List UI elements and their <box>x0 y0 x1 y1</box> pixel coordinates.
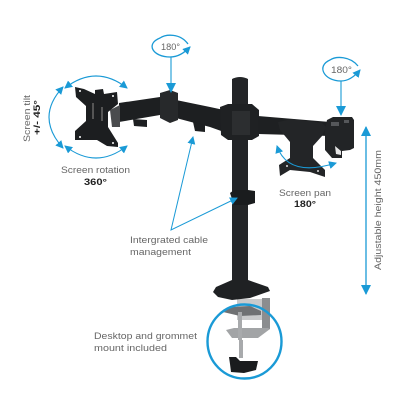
label: pan value: 180° <box>294 199 316 210</box>
left VESA plate <box>75 87 118 147</box>
label: screen pan: Screen pan <box>279 188 331 199</box>
180 rotation indicator right <box>323 58 360 115</box>
clamp knob <box>229 357 258 373</box>
label: adjustable height: Adjustable height 450mm <box>373 150 384 270</box>
label: desktop and grommet mount <box>94 331 197 354</box>
cable management arrows <box>171 137 237 230</box>
180 rotation indicator right: 180° <box>331 65 352 75</box>
label: desktop and grommet mount: mount included <box>94 343 167 354</box>
label: tilt value: +/- 45° <box>32 100 43 135</box>
height arrow <box>365 127 367 294</box>
clamp base <box>213 280 270 300</box>
label: cable management: Intergrated cable <box>130 235 208 246</box>
clamp body <box>223 298 270 338</box>
central collar <box>220 104 259 140</box>
180 rotation indicator left <box>152 35 190 92</box>
clamp screw <box>238 312 243 358</box>
label: cable management <box>130 235 208 258</box>
180 rotation indicator left: 180° <box>161 42 180 52</box>
collar front <box>232 111 250 135</box>
label: desktop and grommet mount: Desktop and grommet <box>94 331 197 342</box>
clamp highlight circle <box>208 304 282 378</box>
label: rotation value: 360° <box>84 177 107 188</box>
pole <box>232 77 248 283</box>
right arm <box>258 116 330 136</box>
screen pan arrow <box>277 146 336 168</box>
label: screen tilt: Screen tilt <box>22 95 33 142</box>
blue rotation arcs <box>49 76 127 158</box>
monitor mount product <box>75 77 354 373</box>
left arm <box>110 90 224 132</box>
right joint <box>325 117 354 158</box>
label: cable management: management <box>130 247 191 258</box>
cable clip <box>230 190 255 205</box>
label: screen rotation: Screen rotation <box>61 165 130 176</box>
right VESA plate <box>278 119 326 177</box>
